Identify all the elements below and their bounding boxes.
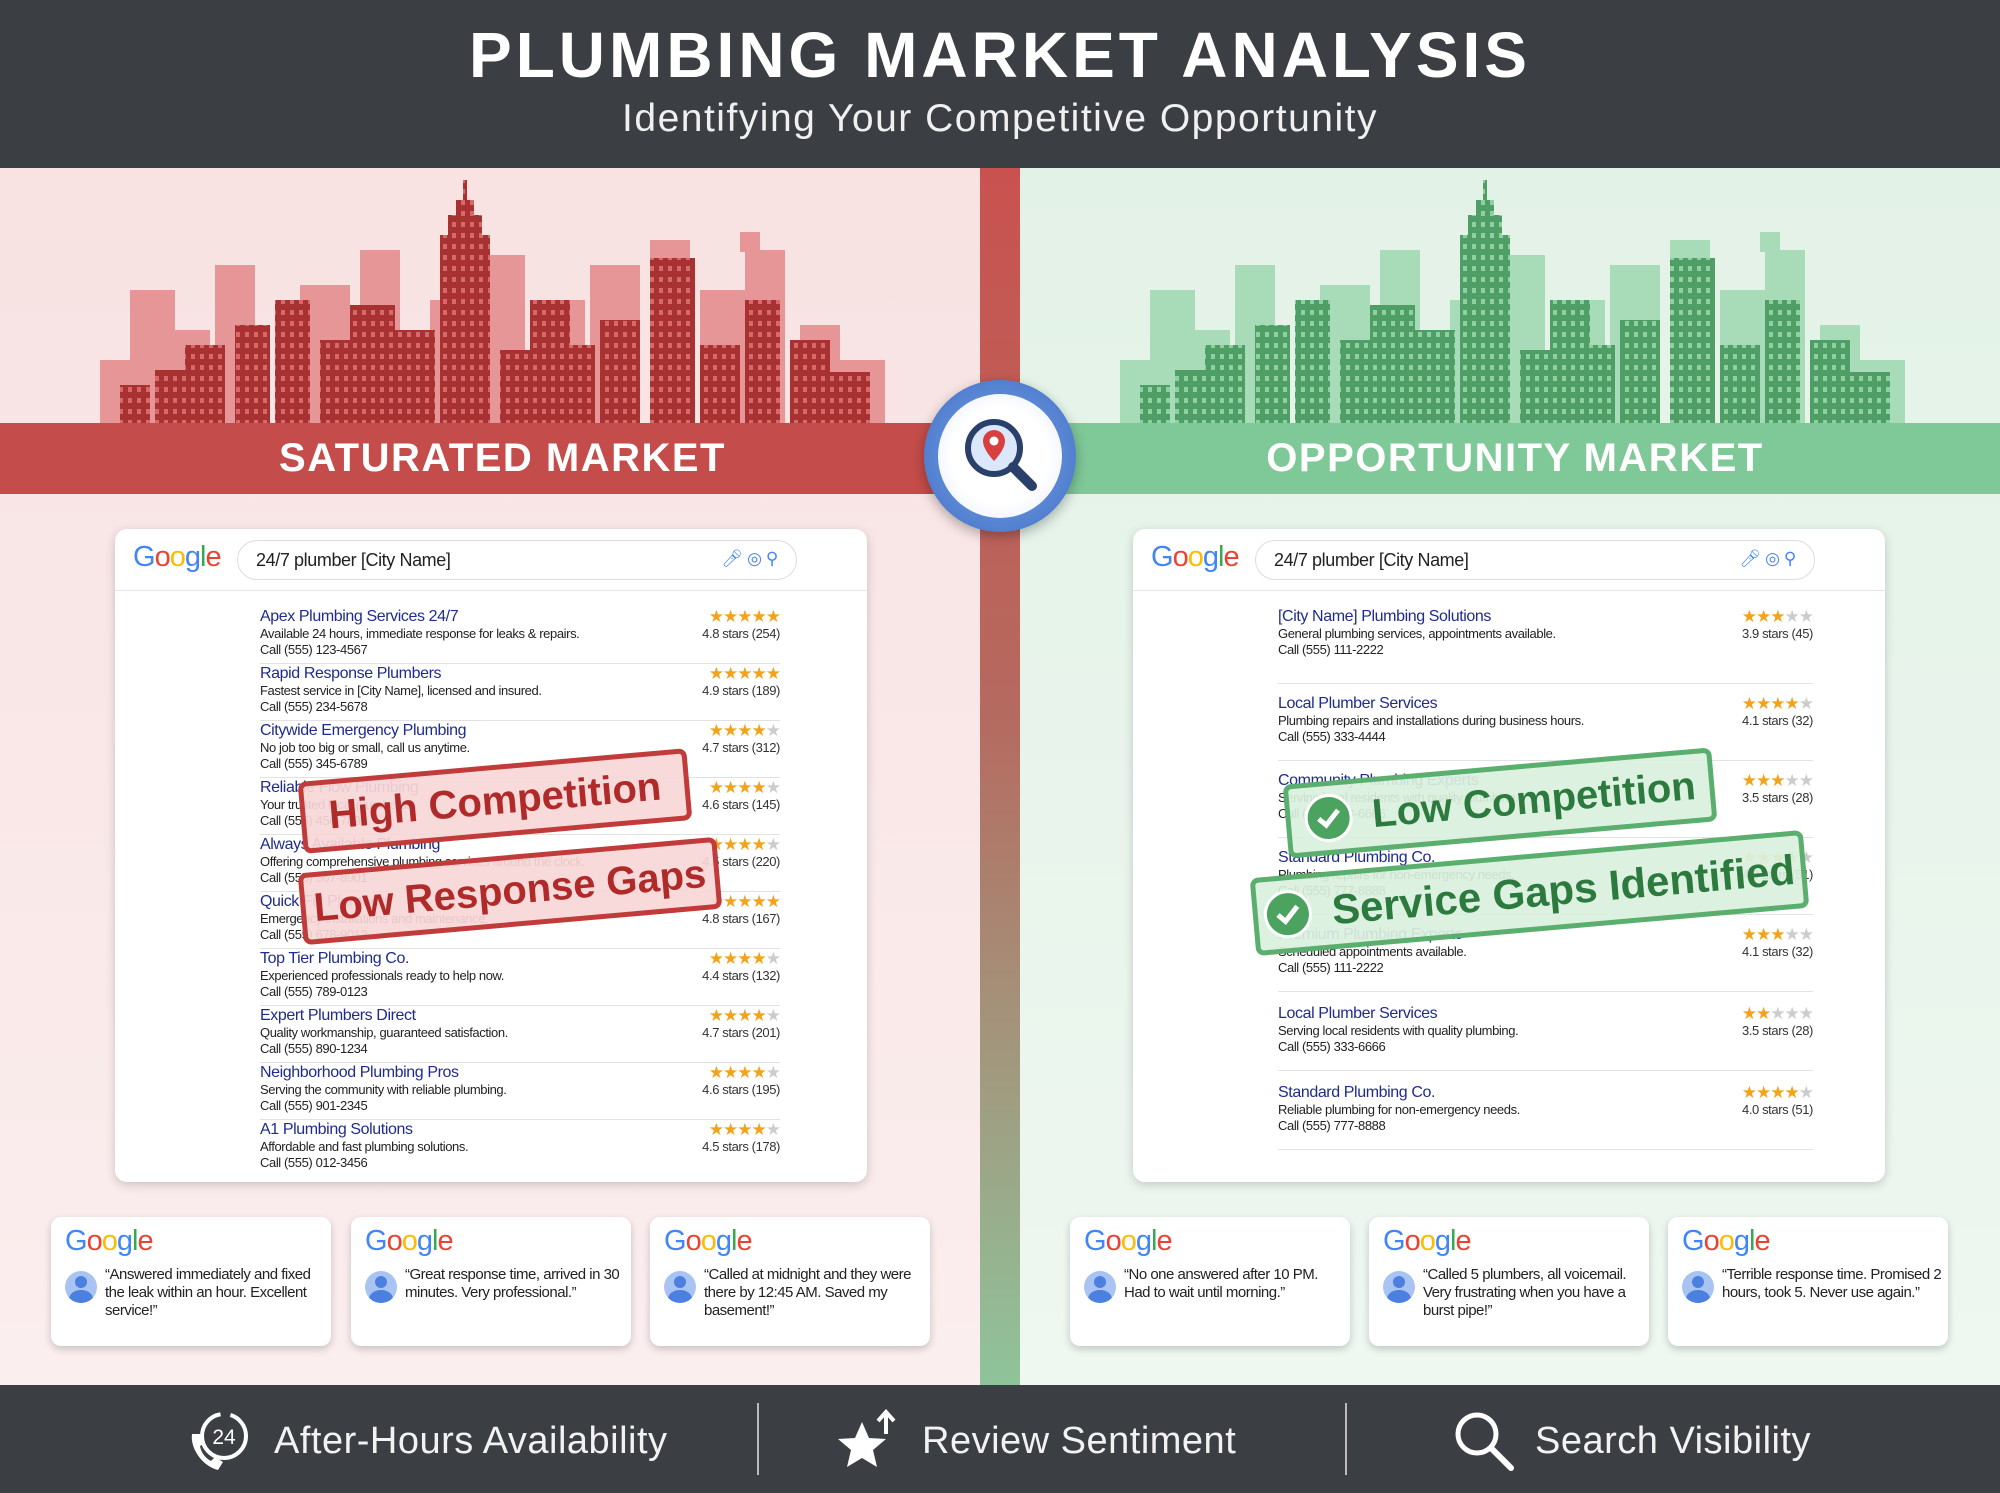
icon: star with arrow — [838, 1409, 896, 1467]
result list: Offering comprehensive plumbing services around the clock. — [260, 854, 585, 869]
stamp: low response gaps — [298, 837, 722, 945]
result list: ★★★★★ — [1742, 848, 1813, 867]
search bar: Google — [133, 541, 221, 573]
result list: Local Plumber Services — [1278, 1005, 1437, 1022]
result list: Affordable and fast plumbing solutions. — [260, 1139, 468, 1154]
result list: Call (555) 123-4567 — [260, 642, 367, 657]
result list: Plumbing repairs and installations during business hours. — [1278, 713, 1584, 728]
review card 5: Google — [1383, 1225, 1471, 1257]
result list: Community Plumbing Experts — [1278, 772, 1478, 789]
skyline: opportunity — [1120, 180, 1905, 423]
review card 3: “Called at midnight and they were there by 12:45 AM. Saved my basement!” — [704, 1266, 911, 1319]
result list: ★★★★★ — [709, 664, 780, 683]
footer item: review sentiment — [838, 1409, 1236, 1467]
panel: saturated search results card — [115, 529, 867, 1182]
result list: Call (555) 789-0123 — [260, 984, 367, 999]
result list: Serving the community with reliable plumbing. — [260, 1082, 506, 1097]
stamp: high competition — [298, 748, 692, 854]
result list: ★★★★★ — [709, 607, 780, 626]
result list: A1 Plumbing Solutions — [260, 1121, 413, 1138]
result list — [1278, 607, 1813, 1150]
result list: 4.6 stars (145) — [702, 797, 780, 812]
skyline: saturated — [100, 180, 885, 423]
result list: 4.8 stars (167) — [702, 911, 780, 926]
result list: 3.5 stars (28) — [1742, 790, 1813, 805]
result list: 4.0 stars (51) — [1742, 867, 1813, 882]
result list: Expert Plumbers Direct — [260, 1007, 416, 1024]
result list: ★★★★★ — [709, 778, 780, 797]
banner: saturated market — [0, 423, 940, 494]
result list: 3.9 stars (45) — [1742, 626, 1813, 641]
stamp: low competition: Low Competition — [1370, 763, 1697, 836]
result list: Quick Fix Plumbers — [260, 893, 392, 910]
footer item: search visibility: Search Visibility — [1535, 1420, 1811, 1462]
result list: Premium Plumbing Experts — [1278, 926, 1462, 943]
icon: magnifier — [1456, 1412, 1514, 1471]
banner: saturated market: SATURATED MARKET — [279, 436, 726, 480]
header — [0, 0, 2000, 168]
result list: Call (555) 567-8901 — [260, 870, 367, 885]
skylines — [100, 180, 1905, 423]
result list: Call (555) 777-8888 — [1278, 883, 1385, 898]
result list: Standard Plumbing Co. — [1278, 1084, 1435, 1101]
result list: No job too big or small, call us anytime. — [260, 740, 470, 755]
result list: 4.1 stars (32) — [1742, 713, 1813, 728]
icon: location search badge — [924, 380, 1076, 532]
result list: Always Available Plumbing — [260, 836, 440, 853]
footer item: after-hours availability — [192, 1412, 668, 1470]
review card 2: Google — [365, 1225, 453, 1257]
result list: ★★★★★ — [709, 1006, 780, 1025]
result list: Plumbing repairs for non-emergency needs. — [1278, 867, 1515, 882]
result list: ★★★★★ — [1742, 771, 1813, 790]
result list: 4.7 stars (201) — [702, 1025, 780, 1040]
subtitle: Identifying Your Competitive Opportunity — [622, 97, 1378, 140]
review card 6: “Terrible response time. Promised 2 hours, took 5. Never use again.” — [1722, 1266, 1941, 1301]
result list: Call (555) 333-4444 — [1278, 729, 1385, 744]
result list: Rapid Response Plumbers — [260, 665, 441, 682]
result list: Serving local residents with quality plumbing. — [1278, 790, 1518, 805]
review cards: saturated — [48, 1216, 934, 1352]
center divider stripe — [980, 168, 1020, 1385]
result list: Fastest service in [City Name], licensed and insured. — [260, 683, 542, 698]
result list: Call (555) 345-6789 — [260, 756, 367, 771]
review card 1: “Answered immediately and fixed the leak within an hour. Excellent service!” — [105, 1266, 310, 1319]
footer item: after-hours availability: After-Hours Availability — [274, 1420, 668, 1462]
review card 1 — [51, 1217, 331, 1346]
result list: Reliable Flow Plumbing — [260, 779, 418, 796]
icon: 24h phone: 24 — [212, 1426, 236, 1449]
stamp: service gaps identified — [1250, 830, 1809, 956]
result list: [City Name] Plumbing Solutions — [1278, 608, 1491, 625]
search bar: 🎤︎ ◎ ⚲ — [1740, 549, 1796, 568]
result list: Neighborhood Plumbing Pros — [260, 1064, 459, 1081]
stamp: low competition — [1283, 747, 1717, 859]
review card 2: “Great response time, arrived in 30 minutes. Very professional.” — [405, 1266, 619, 1301]
result list: Local Plumber Services — [1278, 695, 1437, 712]
footer — [0, 1385, 2000, 1493]
title: PLUMBING MARKET ANALYSIS — [469, 19, 1531, 91]
result list: ★★★★★ — [1742, 1004, 1813, 1023]
search bar: 🎤︎ ◎ ⚲ — [722, 549, 778, 568]
result list: Call (555) 456-7890 — [260, 813, 367, 828]
result list: Reliable plumbing for non-emergency needs. — [1278, 1102, 1520, 1117]
result list: Call (555) 777-8888 — [1278, 1118, 1385, 1133]
review card 5 — [1369, 1217, 1649, 1346]
result list: ★★★★★ — [709, 1120, 780, 1139]
review card 4: Google — [1084, 1225, 1172, 1257]
result list: ★★★★★ — [709, 892, 780, 911]
search bar: 24/7 plumber [City Name] — [1274, 550, 1468, 570]
review card 6 — [1668, 1217, 1948, 1346]
result list: Top Tier Plumbing Co. — [260, 950, 409, 967]
banner: opportunity market — [1060, 423, 2000, 494]
result list: Experienced professionals ready to help now. — [260, 968, 504, 983]
footer item: search visibility — [1456, 1412, 1811, 1471]
result list: General plumbing services, appointments available. — [1278, 626, 1556, 641]
panel: opportunity search results card — [1133, 529, 1885, 1182]
result list: Serving local residents with quality plumbing. — [1278, 1023, 1518, 1038]
result list: Citywide Emergency Plumbing — [260, 722, 466, 739]
banner: opportunity market: OPPORTUNITY MARKET — [1266, 436, 1764, 480]
review card 4: “No one answered after 10 PM. Had to wait until morning.” — [1124, 1266, 1318, 1301]
result list: Call (555) 678-9012 — [260, 927, 367, 942]
result list: 4.5 stars (178) — [702, 1139, 780, 1154]
panel: saturated market background — [0, 168, 980, 1385]
result list: Quality workmanship, guaranteed satisfaction. — [260, 1025, 508, 1040]
stamp: service gaps identified: Service Gaps Identified — [1330, 846, 1797, 933]
result list: Standard Plumbing Co. — [1278, 849, 1435, 866]
result list: Emergency installations and maintenance. — [260, 911, 488, 926]
result list: Apex Plumbing Services 24/7 — [260, 608, 458, 625]
review card 2 — [351, 1217, 631, 1346]
result list: ★★★★★ — [709, 721, 780, 740]
stamp: low response gaps: Low Response Gaps — [312, 851, 708, 930]
review card 3: Google — [664, 1225, 752, 1257]
result list: Call (555) 890-1234 — [260, 1041, 367, 1056]
result list: ★★★★★ — [1742, 1083, 1813, 1102]
result list: 4.5 stars (220) — [702, 854, 780, 869]
result list: Scheduled appointments available. — [1278, 944, 1466, 959]
result list: Available 24 hours, immediate response for leaks & repairs. — [260, 626, 579, 641]
review card 5: “Called 5 plumbers, all voicemail. Very frustrating when you have a burst pipe!” — [1423, 1266, 1626, 1319]
search bar — [1133, 529, 1885, 591]
result list: 4.8 stars (254) — [702, 626, 780, 641]
stamp: high competition: High Competition — [327, 764, 663, 837]
result list: ★★★★★ — [1742, 694, 1813, 713]
result list: Call (555) 333-6666 — [1278, 1039, 1385, 1054]
result list: 4.1 stars (32) — [1742, 944, 1813, 959]
search bar: Google — [1151, 541, 1239, 573]
result list: 3.5 stars (28) — [1742, 1023, 1813, 1038]
result list: Call (555) 012-3456 — [260, 1155, 367, 1170]
result list: 4.7 stars (312) — [702, 740, 780, 755]
result list: ★★★★★ — [709, 949, 780, 968]
result list — [260, 607, 780, 1170]
result list: 4.6 stars (195) — [702, 1082, 780, 1097]
result list: 4.0 stars (51) — [1742, 1102, 1813, 1117]
result list: Call (555) 111-2222 — [1278, 642, 1383, 657]
result list: ★★★★★ — [709, 1063, 780, 1082]
result list: ★★★★★ — [1742, 925, 1813, 944]
result list: Call (555) 333-6666 — [1278, 806, 1385, 821]
result list: Call (555) 111-2222 — [1278, 960, 1383, 975]
result list: 4.9 stars (189) — [702, 683, 780, 698]
panel: opportunity market background — [1020, 168, 2000, 1385]
review card 4 — [1070, 1217, 1350, 1346]
footer item: review sentiment: Review Sentiment — [922, 1420, 1236, 1462]
result list: Call (555) 901-2345 — [260, 1098, 367, 1113]
result list: Your trusted local plumbers. — [260, 797, 409, 812]
search bar — [115, 529, 867, 591]
review card 6: Google — [1682, 1225, 1770, 1257]
result list: Call (555) 234-5678 — [260, 699, 367, 714]
review card 1: Google — [65, 1225, 153, 1257]
search bar: 24/7 plumber [City Name] — [256, 550, 450, 570]
result list: ★★★★★ — [1742, 607, 1813, 626]
icon: 24h phone — [192, 1412, 248, 1470]
result list: ★★★★★ — [709, 835, 780, 854]
result list: 4.4 stars (132) — [702, 968, 780, 983]
review card 3 — [650, 1217, 930, 1346]
